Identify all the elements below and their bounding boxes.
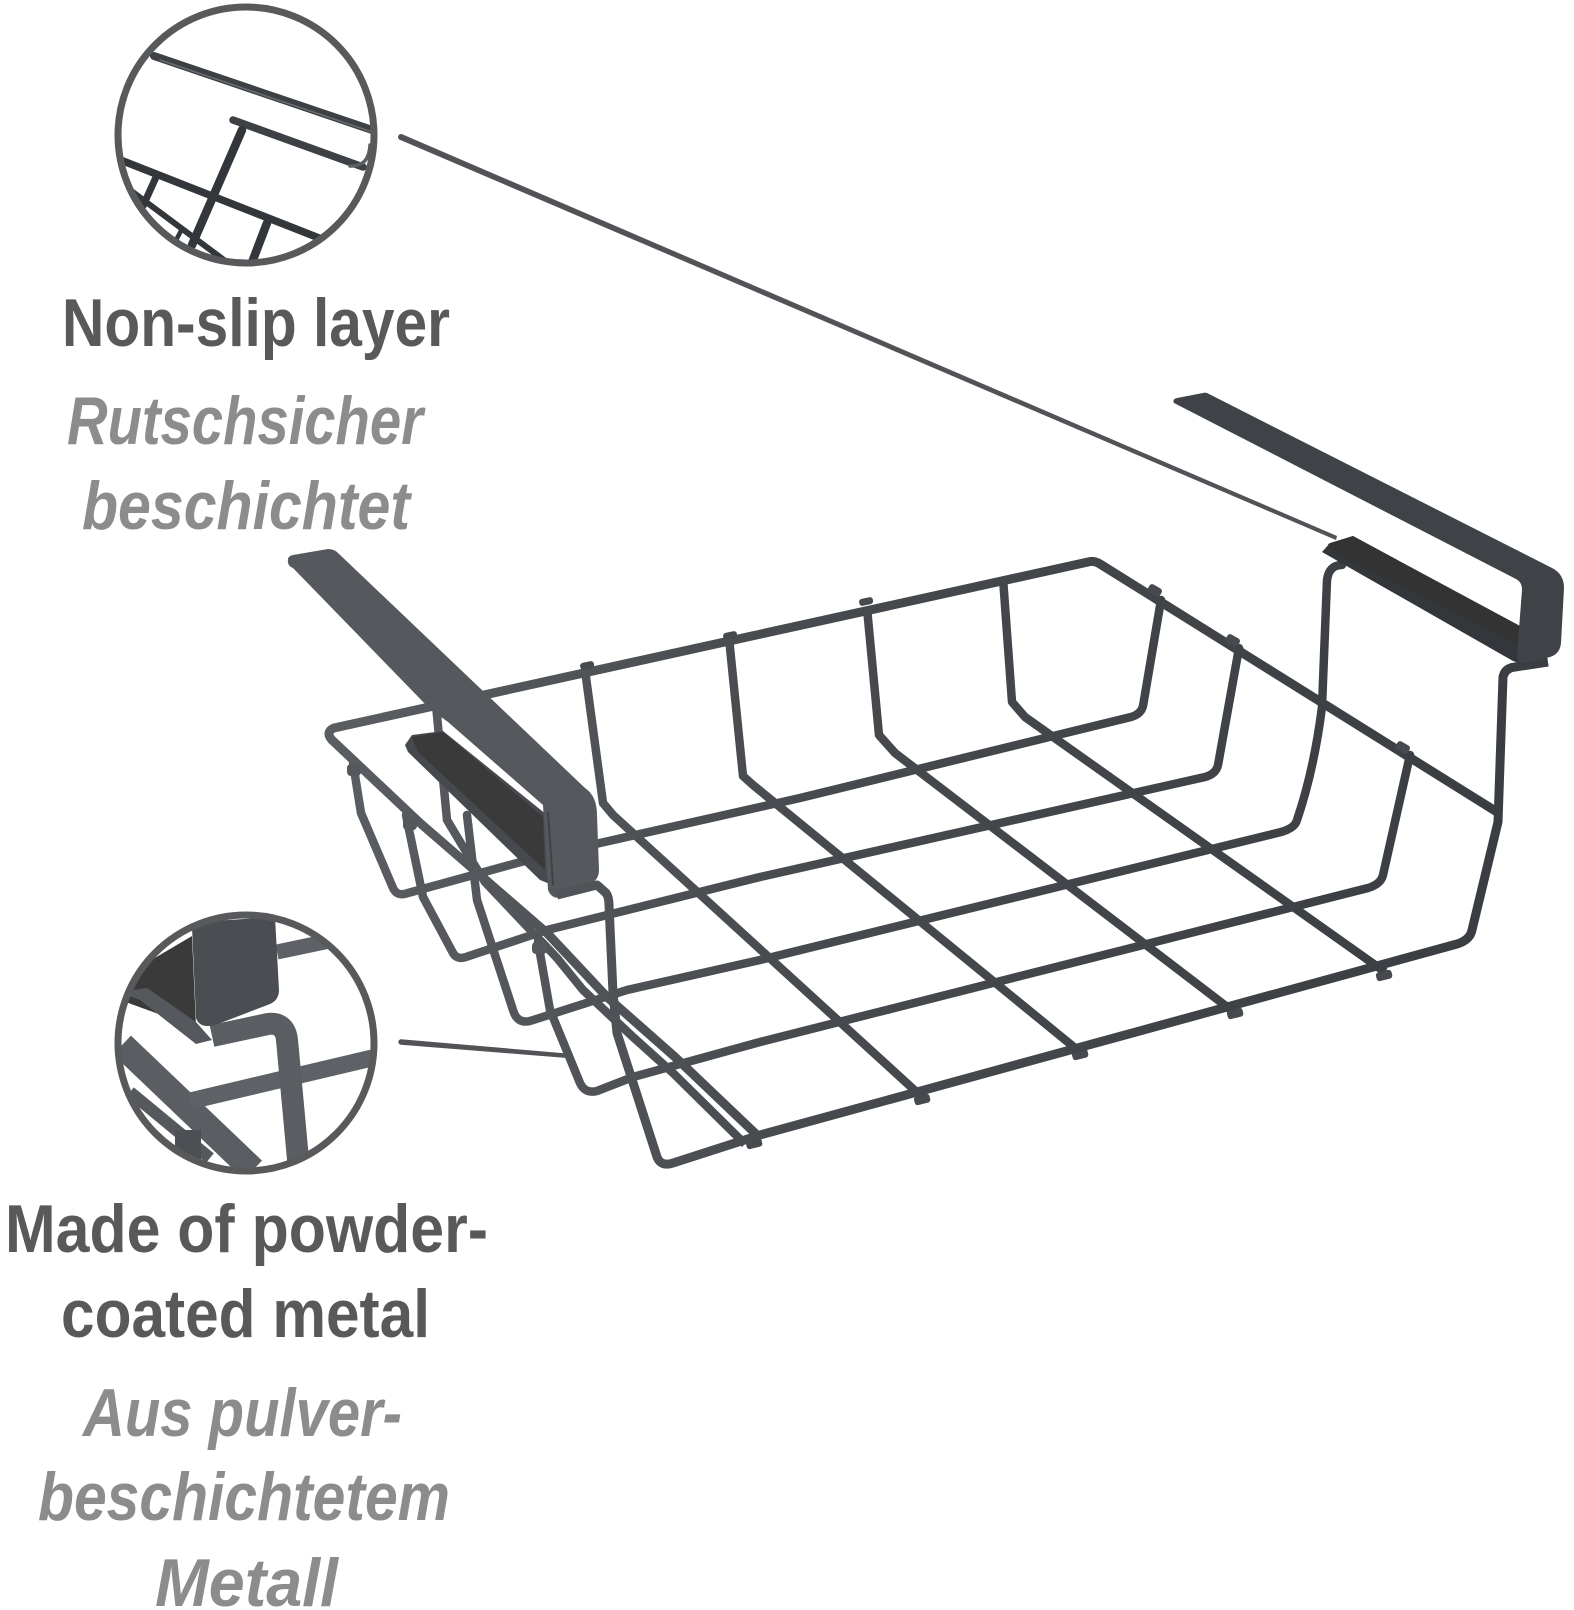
subheading: Aus pulverbeschichtetem Metall: beschichtetem	[38, 1459, 450, 1535]
basket cross wires	[436, 578, 1385, 1144]
subheading: Rutschsicher beschichtet: Rutschsicher	[67, 383, 426, 459]
subheading: Rutschsicher beschichtet	[67, 383, 426, 544]
detail circle ring	[118, 7, 374, 263]
heading: Non-slip layer: Non-slip layer	[62, 285, 450, 361]
leader line: non-slip layer	[398, 134, 1337, 540]
subheading: Rutschsicher beschichtet: beschichtet	[82, 468, 412, 544]
heading: Made of powder-coated metal: Made of powder-	[5, 1191, 488, 1267]
heading: Made of powder-coated metal: coated metal	[61, 1276, 430, 1352]
basket top rim	[329, 561, 1497, 1136]
detail circle contents: wire and clip edge view	[123, 56, 375, 265]
basket long U wires	[353, 565, 1410, 1092]
heading: Made of powder-coated metal	[5, 1191, 488, 1352]
right clip: top plate and front bend	[1173, 393, 1564, 663]
product: under-shelf wire basket	[288, 393, 1564, 1164]
subheading: Aus pulverbeschichtetem Metall	[38, 1375, 450, 1610]
subheading: Aus pulverbeschichtetem Metall: Aus pulver-	[81, 1375, 402, 1451]
detail circle ring	[118, 915, 374, 1171]
left clip: top plate and front bend	[288, 549, 599, 898]
detail circle contents: clip and hook close-up	[118, 917, 372, 1170]
left clip: felt pad and lower plate	[405, 731, 550, 884]
callout: powder-coated metal detail	[118, 915, 374, 1171]
left clip slot edge	[548, 812, 553, 885]
rim hooks and floor feet	[347, 583, 1411, 1150]
right clip: felt pad and lower plate	[1322, 536, 1522, 664]
leader line: powder-coated metal	[398, 1039, 567, 1058]
callout: non-slip layer detail	[118, 7, 375, 265]
front hanger wire	[557, 662, 1548, 1164]
